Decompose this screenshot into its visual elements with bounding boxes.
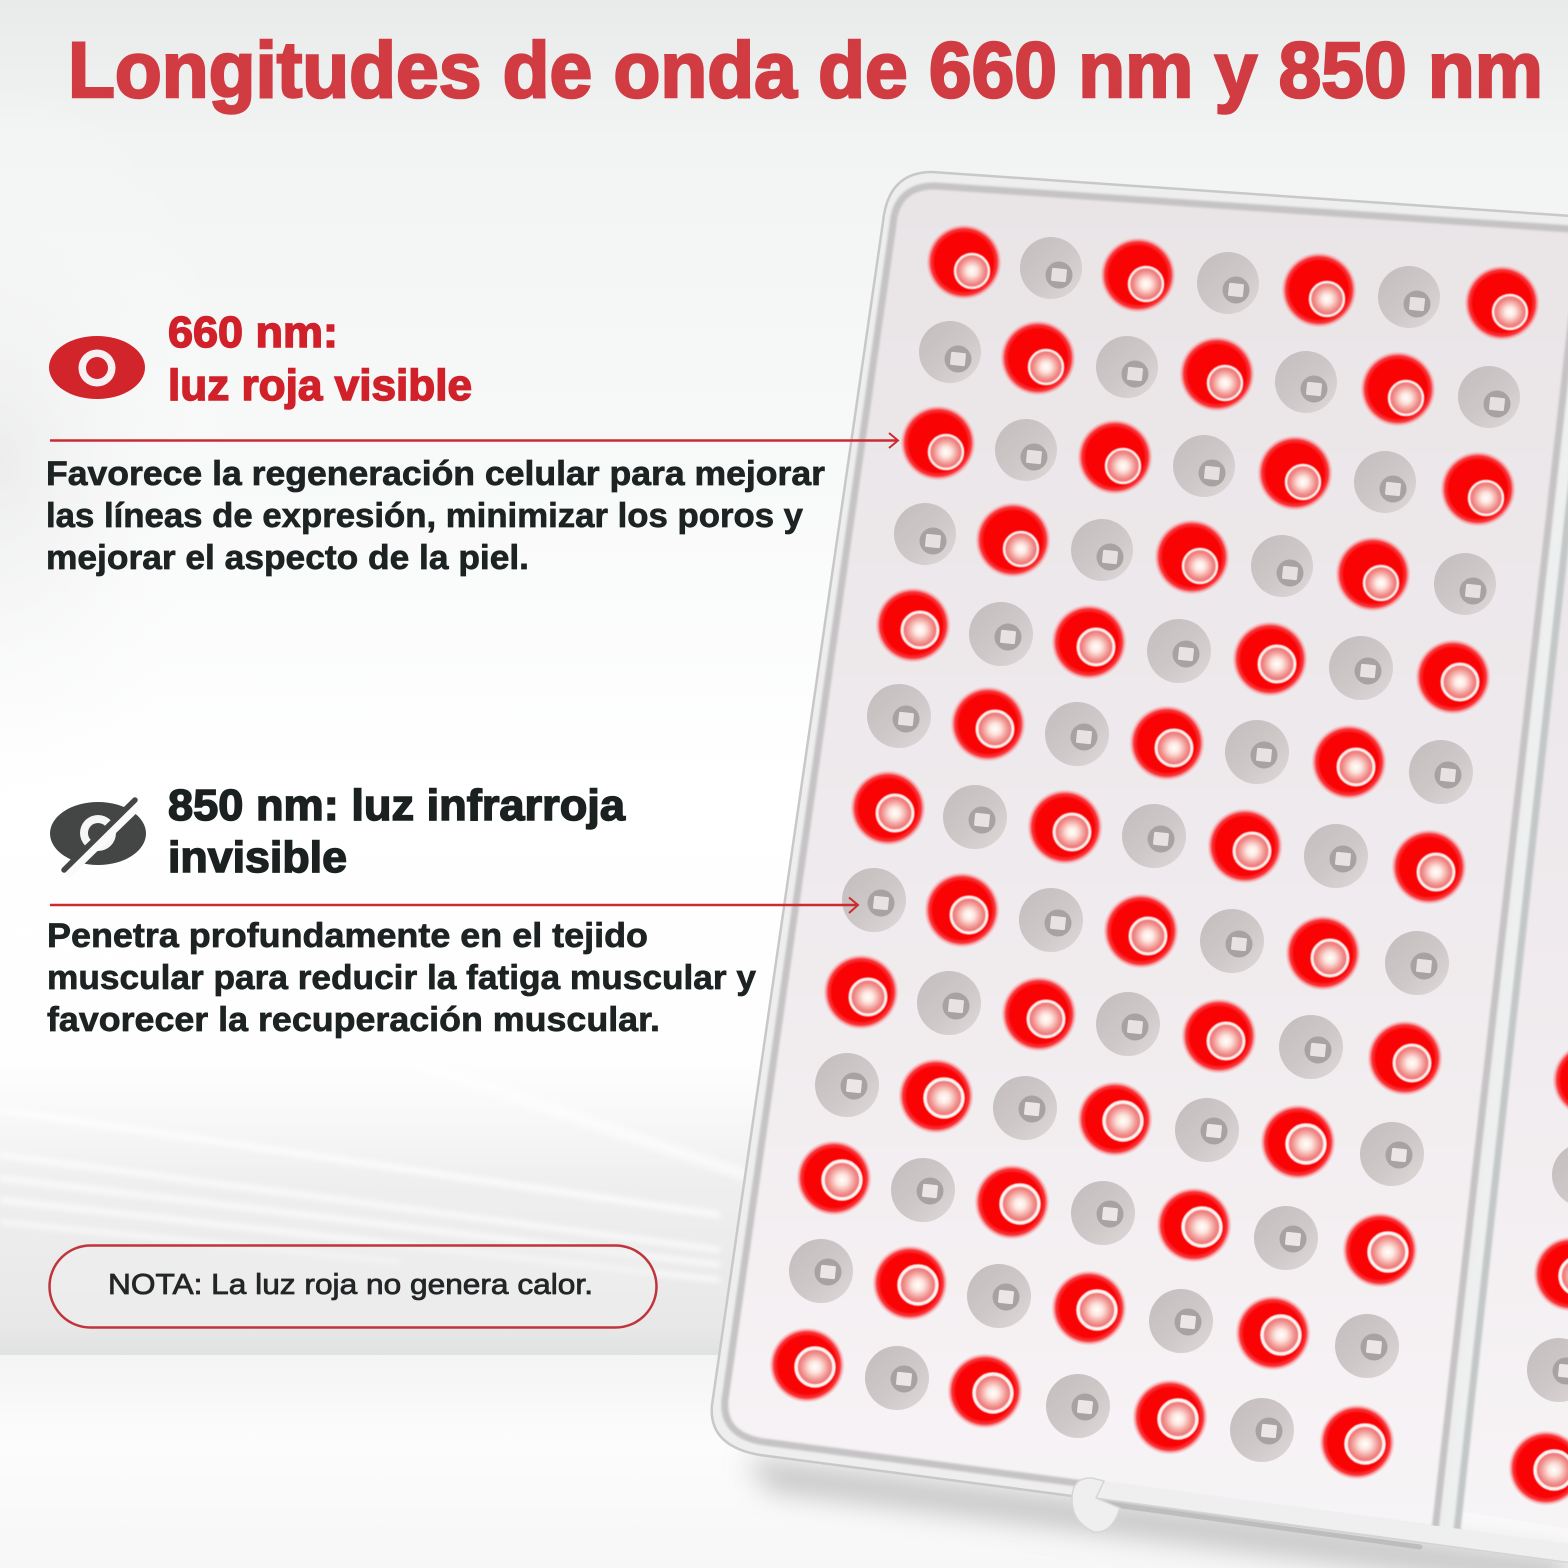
text: 660 nm description: las líneas de expresión, minimizar los poros y <box>46 497 803 535</box>
icon: crossed eye <box>50 800 146 874</box>
text: 850 nm description: muscular para reducir la fatiga muscular y <box>47 959 756 997</box>
heading: 660 nm <box>168 308 472 410</box>
callout: note pill: NOTA: La luz roja no genera calor. <box>108 1269 593 1301</box>
heading: 850 nm <box>168 781 626 882</box>
LED row 13 <box>769 1327 1395 1480</box>
stand: hook and rail <box>1072 1478 1568 1564</box>
LED row 10 <box>815 1053 1424 1186</box>
text: 850 nm description: Penetra profundamente en el tejido <box>47 917 648 955</box>
heading: 660 nm: luz roja visible <box>168 361 472 410</box>
heading: 850 nm: invisible <box>168 833 347 882</box>
LED row 5 <box>875 587 1491 715</box>
first light panel <box>712 172 1568 1545</box>
arrow: 850 nm <box>50 898 858 913</box>
LED row 9 <box>823 954 1443 1096</box>
LED row 4 <box>894 502 1496 615</box>
icon: red eye <box>49 336 145 399</box>
text: 850 nm description <box>47 917 756 1039</box>
LEDs of second panel <box>1508 1042 1568 1506</box>
panel shadow <box>745 1458 1568 1568</box>
text: 660 nm description <box>46 455 825 577</box>
LED row 6 <box>867 684 1473 804</box>
heading: 850 nm: 850 nm: luz infrarroja <box>168 781 626 830</box>
callout: note pill <box>50 1246 656 1328</box>
LED row 12 <box>789 1239 1399 1378</box>
title: Longitudes de onda de 660 nm y 850 nm <box>68 25 1543 114</box>
text: 660 nm description: Favorece la regeneración celular para mejorar <box>46 455 825 493</box>
LED row 8 <box>842 868 1449 995</box>
LED row 2 <box>919 320 1520 428</box>
LED row 11 <box>796 1140 1418 1288</box>
LED row 7 <box>850 770 1467 905</box>
arrow: 660 nm <box>50 433 898 448</box>
LED row 1 <box>926 224 1540 341</box>
heading: 660 nm: 660 nm: <box>168 308 338 357</box>
text: 850 nm description: favorecer la recuperación muscular. <box>47 1001 660 1039</box>
LED row 3 <box>900 405 1516 527</box>
second light panel <box>1450 300 1568 1540</box>
text: 660 nm description: mejorar el aspecto de la piel. <box>46 539 529 577</box>
